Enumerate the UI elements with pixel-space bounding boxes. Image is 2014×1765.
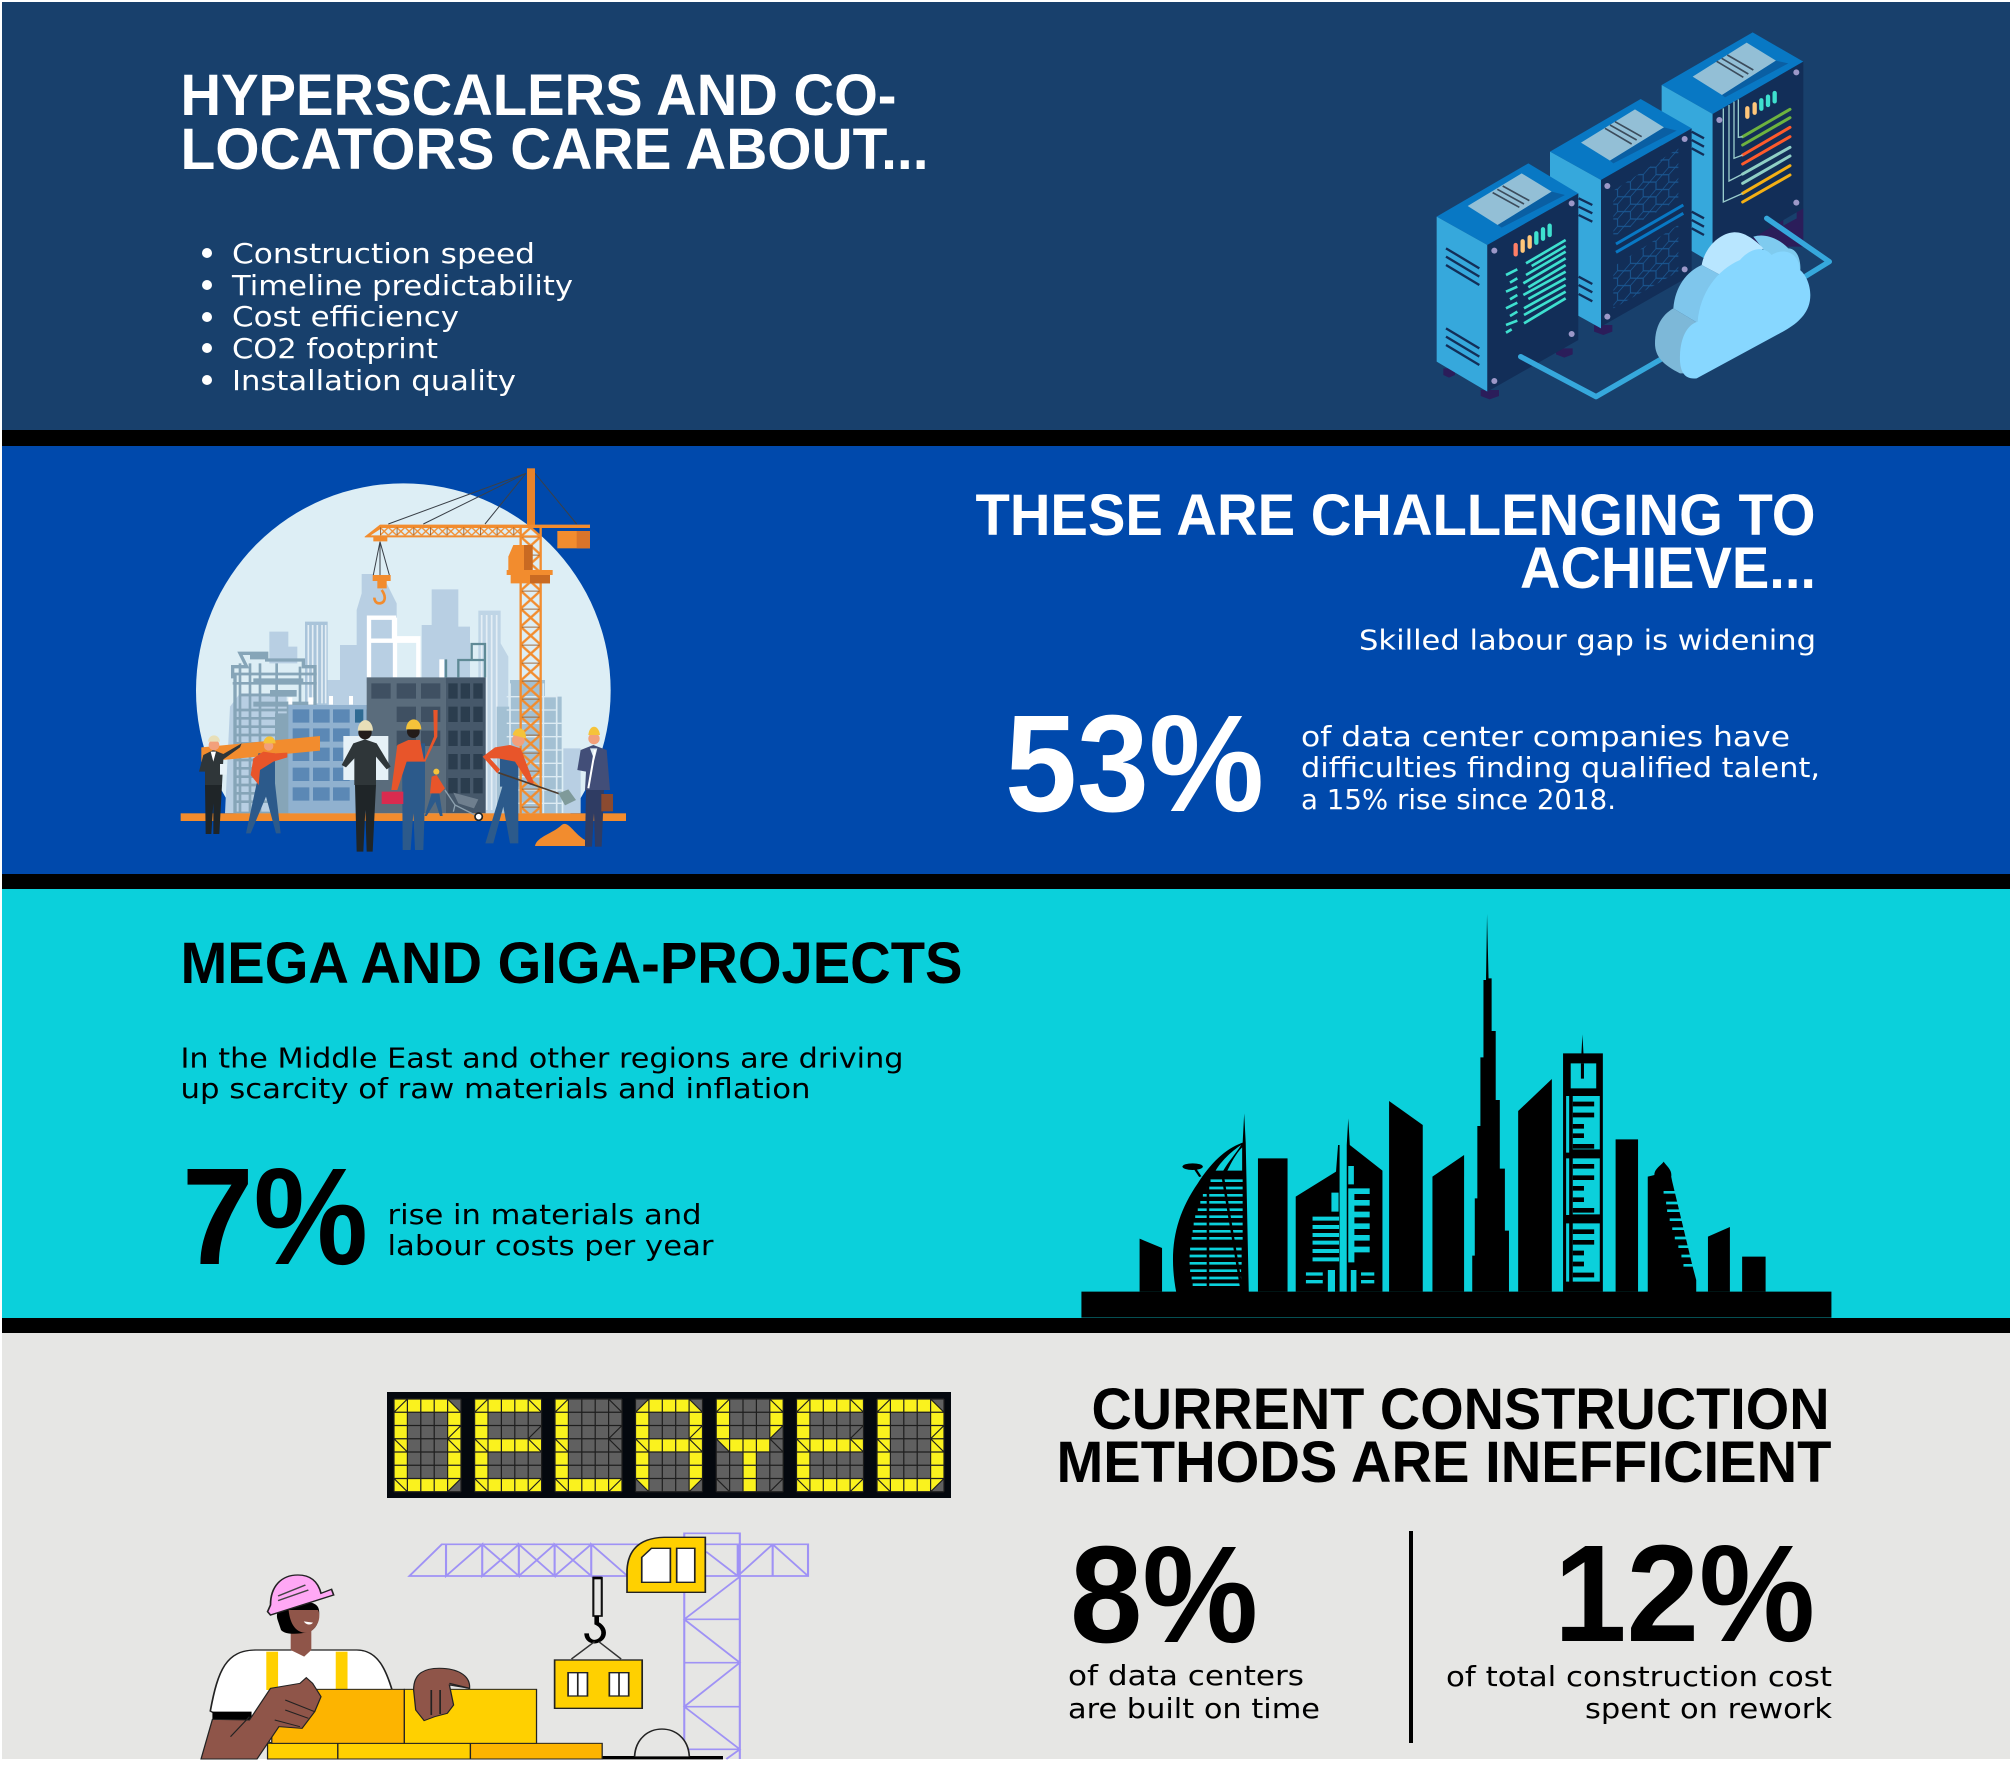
twisted tower — [1648, 1162, 1696, 1293]
lattice crane — [409, 1533, 808, 1759]
bullet list of priorities — [202, 237, 573, 397]
tower crane — [365, 468, 590, 813]
stat description — [1301, 720, 1820, 816]
crane cabin — [627, 1537, 705, 1592]
backdrop circle with city — [196, 483, 611, 814]
heading: these are challenging to achieve — [976, 483, 1816, 601]
stat description: rework — [1446, 1660, 1833, 1725]
heading: current construction methods: METHODS ARE INEFFICIENT — [1056, 1430, 1832, 1495]
vertical divider — [1409, 1531, 1413, 1743]
board letter E — [796, 1399, 864, 1492]
ground and dome — [602, 1753, 723, 1763]
board letter A — [636, 1399, 702, 1492]
server rack middle — [1550, 99, 1692, 335]
stat description: a 15% rise since 2018. — [1301, 783, 1616, 816]
heading: current construction methods — [1056, 1377, 1832, 1495]
black divider — [2, 1318, 2010, 1333]
panel: mega and giga-projects — [2, 889, 2010, 1318]
cloud — [1655, 232, 1810, 379]
stat: 8 percent: 8% — [1070, 1518, 1258, 1672]
stat: 53 percent: 53% — [1005, 687, 1264, 841]
bullet list of priorities: Cost efficiency — [232, 300, 459, 333]
stat: 7 percent: 7% — [182, 1140, 368, 1294]
body text: middle east — [180, 1042, 904, 1105]
worker arms and hands — [201, 1668, 470, 1759]
heading: these are challenging to achieve: THESE ARE CHALLENGING TO — [976, 483, 1816, 548]
worker: supervisor with clipboard — [199, 735, 242, 834]
timber beam — [201, 736, 320, 762]
panel background royal blue — [2, 446, 2010, 874]
stat description — [388, 1198, 714, 1262]
delayed departure board — [387, 1392, 951, 1498]
burj khalifa — [1472, 914, 1509, 1292]
heading: mega and giga-projects: MEGA AND GIGA-PROJECTS — [180, 931, 962, 996]
stat description: of data center companies have — [1301, 720, 1790, 753]
slotted tower — [1563, 1034, 1603, 1292]
panel background cyan — [2, 889, 2010, 1318]
icon: servers connected to cloud — [1437, 32, 1829, 399]
heading: current construction methods: CURRENT CONSTRUCTION — [1092, 1377, 1830, 1442]
worker: shoveling — [483, 728, 576, 843]
worker: engineer with briefcase — [577, 727, 613, 847]
illustration: construction site with crane and workers — [180, 468, 626, 852]
illustration: bricklayer and crane — [201, 1533, 808, 1759]
panel background grey — [2, 1333, 2010, 1759]
stat description: rework: of total construction cost — [1446, 1660, 1832, 1693]
server rack back — [1662, 32, 1803, 263]
heading: hyperscalers and co-locators: HYPERSCALERS AND CO- — [180, 63, 896, 128]
stat description: built on time — [1068, 1659, 1320, 1725]
stat description: built on time: of data centers — [1068, 1659, 1304, 1692]
stat description: built on time: are built on time — [1068, 1692, 1320, 1725]
board letter D — [877, 1399, 944, 1492]
board letter D — [394, 1399, 461, 1492]
panel: challenging to achieve — [2, 446, 2010, 898]
bricklayer worker — [210, 1575, 393, 1743]
panel: hyperscalers — [2, 2, 2010, 430]
black divider — [2, 874, 2010, 889]
worker: raising arm with toolbox — [382, 710, 438, 850]
worker: carrying beam — [246, 736, 287, 833]
board letter L — [555, 1399, 622, 1492]
stat: 12 percent: 12% — [1554, 1517, 1815, 1671]
board letter E — [475, 1399, 542, 1492]
worker: with wheelbarrow — [425, 769, 482, 820]
sand pile — [535, 824, 585, 846]
hook and cable — [571, 1577, 621, 1659]
body text: middle east: In the Middle East and other regions are driving — [180, 1042, 904, 1074]
subheading: skilled labour gap: Skilled labour gap is widening — [1359, 624, 1816, 656]
bullet list of priorities: Timeline predictability — [231, 269, 573, 302]
bullet list of priorities: CO2 footprint — [232, 332, 438, 365]
bullet list of priorities: Construction speed — [232, 237, 535, 270]
ground line — [181, 813, 626, 821]
server rack front — [1437, 163, 1578, 399]
heading: hyperscalers and co-locators — [180, 63, 928, 182]
panel: current construction methods — [2, 1333, 2010, 1759]
board letter Y — [716, 1399, 783, 1492]
stat description: rework: spent on rework — [1585, 1692, 1833, 1725]
body text: middle east: up scarcity of raw materials and inflation — [180, 1072, 810, 1105]
heading: these are challenging to achieve: ACHIEVE... — [1520, 536, 1816, 601]
worker: hard hat viewing plan — [342, 720, 391, 852]
stat description: rise in materials and — [388, 1198, 702, 1231]
network cables — [1521, 218, 1829, 397]
burj al arab — [1173, 1113, 1249, 1293]
heading: hyperscalers and co-locators: LOCATORS CARE ABOUT... — [180, 117, 928, 182]
stat description: difficulties finding qualified talent, — [1301, 751, 1820, 784]
panel background navy — [2, 2, 2010, 430]
hanging yellow block — [555, 1660, 642, 1708]
stat description: labour costs per year — [388, 1229, 714, 1262]
bullet list of priorities: Installation quality — [232, 364, 516, 397]
brick wall — [268, 1689, 602, 1759]
illustration: dubai skyline silhouette — [1081, 914, 1831, 1318]
black divider — [2, 430, 2010, 446]
